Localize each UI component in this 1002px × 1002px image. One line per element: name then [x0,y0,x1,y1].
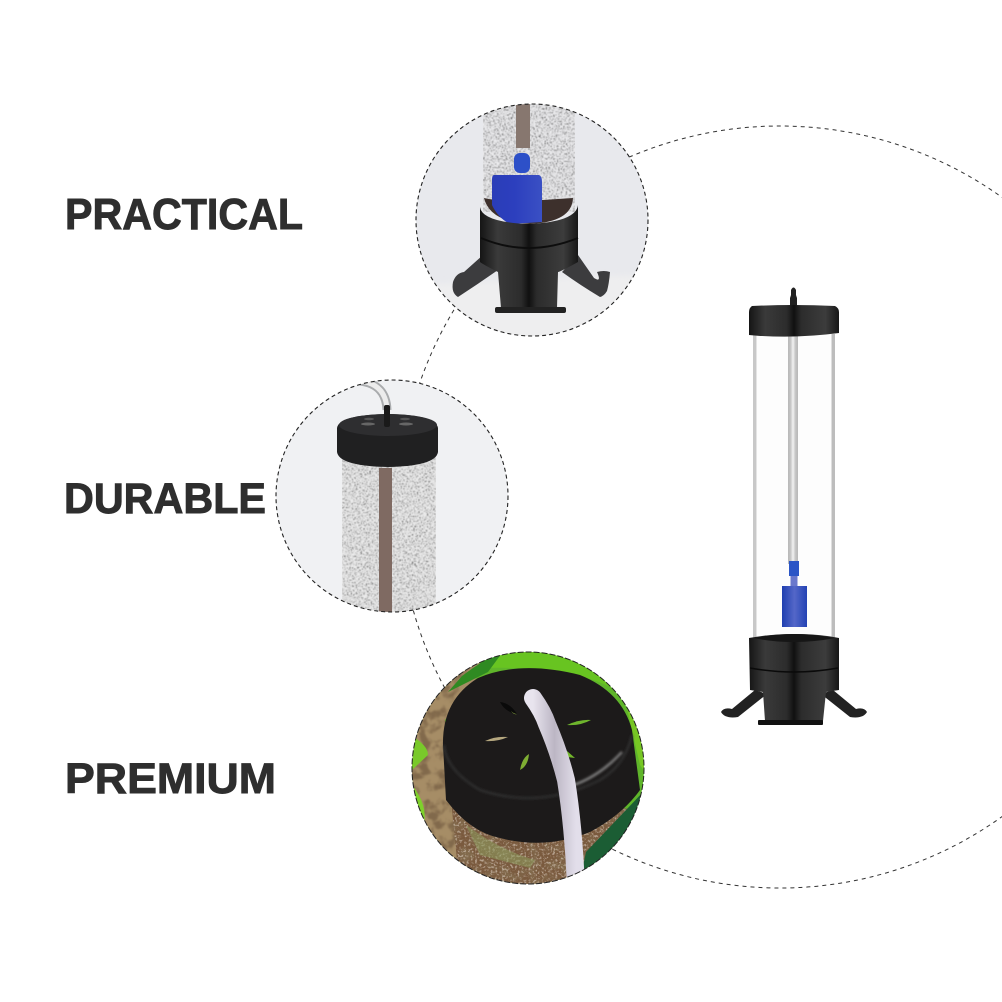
large dashed circle [399,126,1002,888]
dashed outline [416,104,648,336]
inner pipe [788,334,798,564]
green leaves [412,652,644,820]
gravel background [412,662,480,859]
black base [453,205,610,313]
product: full reactor tube [721,288,867,725]
brown sediment [484,198,573,224]
air hose [360,381,387,410]
floor highlight [416,275,648,340]
dashed outline [412,652,644,884]
blue air stone [492,153,542,224]
dashed outline [276,380,508,612]
nozzle [790,288,797,306]
black lid [337,405,438,467]
infographic [66,104,1002,888]
black base [721,634,867,725]
panel: premium detail circle [412,652,644,884]
heading: PREMIUM: PREMIUM [65,755,276,803]
black lid [443,668,640,843]
heading: PRACTICAL: PRACTICAL [65,190,303,239]
clear tube walls [753,334,835,640]
clear air hose [533,698,576,890]
blue air stone [782,561,807,627]
brown stem [379,468,392,614]
panel: practical detail circle [416,100,648,340]
brown stem [516,100,530,148]
black lid [749,305,839,337]
glitter and gravel tube [452,807,635,884]
panel: durable detail circle [276,380,508,615]
glitter tube [342,455,436,615]
heading: DURABLE: DURABLE [64,475,266,523]
glitter tube [483,100,575,212]
dark green strip [584,794,640,869]
